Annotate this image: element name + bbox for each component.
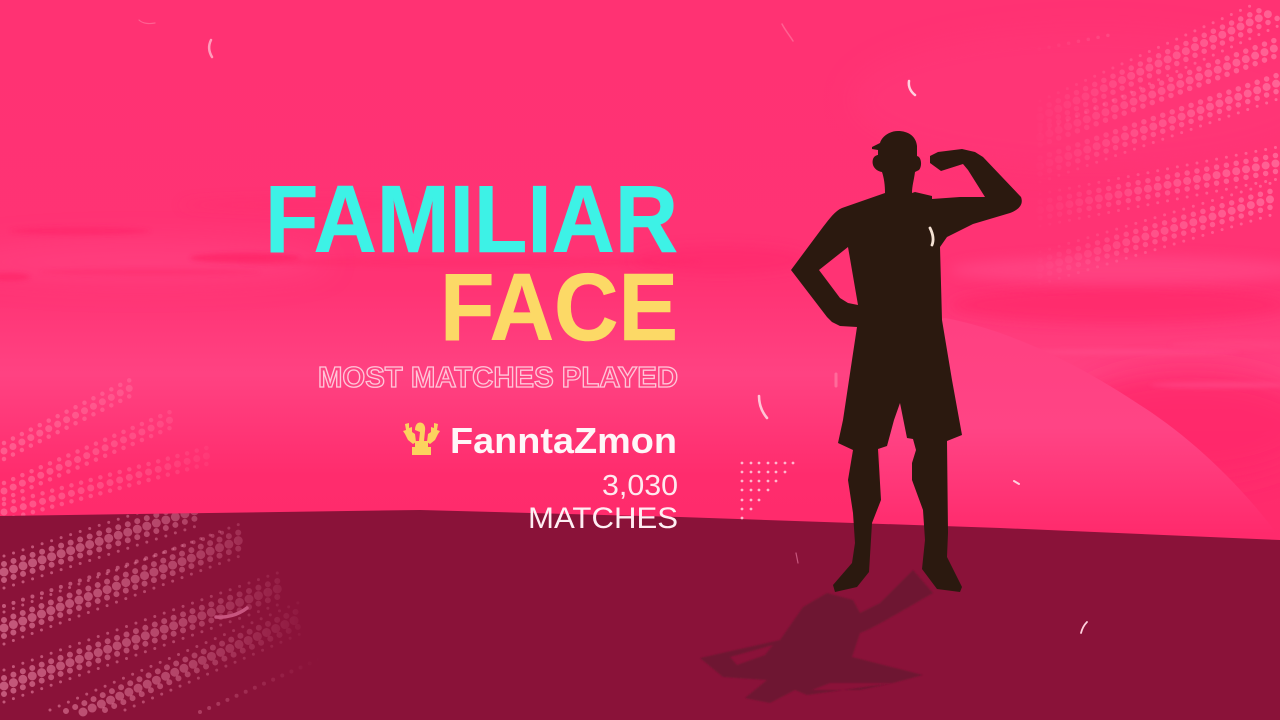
title: FACE: FACE xyxy=(440,254,678,361)
background: clouds xyxy=(0,30,1280,480)
stat: match count: 3,030 xyxy=(602,470,678,502)
silhouette: player saluting xyxy=(791,131,1022,592)
title: FAMILIAR: FAMILIAR xyxy=(265,166,678,273)
halftone: top right xyxy=(1000,6,1278,284)
halftone: lower left on sky xyxy=(4,380,210,520)
stat: label: MATCHES xyxy=(528,502,678,535)
confetti pieces xyxy=(139,20,1087,633)
subtitle: most matches played: MOST MATCHES PLAYED xyxy=(318,362,678,394)
background: light hill on the right xyxy=(880,318,1280,538)
icon: trophy with laurels xyxy=(403,423,440,455)
halftone: lower left on ground xyxy=(0,513,297,716)
ground xyxy=(0,510,1280,720)
player name: FanntaZmon xyxy=(450,420,677,461)
decorative dot triangle xyxy=(741,462,794,519)
silhouette shadow xyxy=(700,570,933,703)
